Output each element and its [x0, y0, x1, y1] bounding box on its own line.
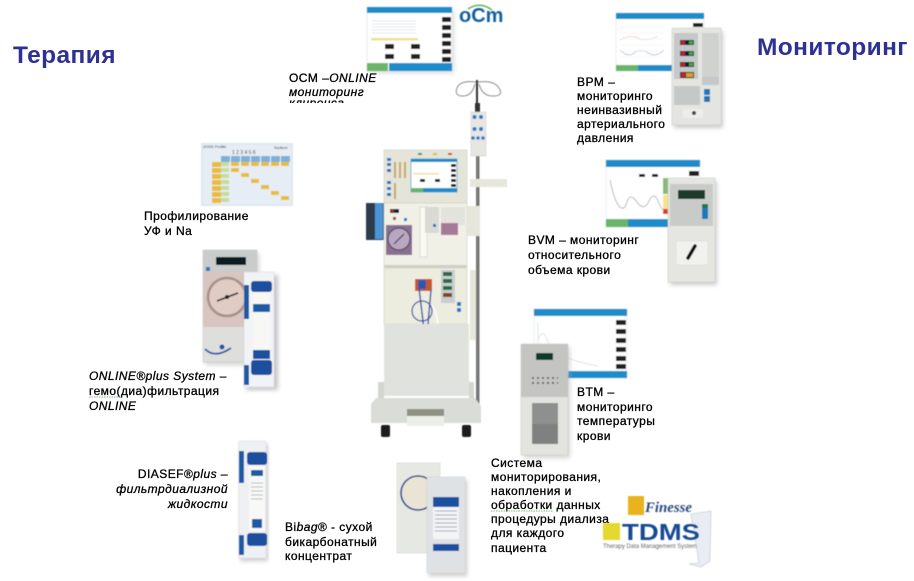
- divider shelf: [384, 265, 467, 268]
- BPM caption: артериального: [577, 117, 665, 131]
- Finesse TDMS logo: [603, 496, 711, 567]
- Bibag caption: Bibag® - сухой: [285, 520, 373, 534]
- Profile card: dOSS Profile: [203, 144, 227, 149]
- Bibag caption: бикарбонатный: [285, 535, 377, 549]
- Finesse TDMS logo: Finesse: [644, 500, 692, 516]
- concentrate pouch: [366, 203, 386, 240]
- BPM caption: неинвазивный: [577, 103, 662, 117]
- BVM caption: относительного: [528, 248, 621, 262]
- ONLINEplus caption: ONLINE®plus System –: [89, 369, 227, 383]
- TDMS caption: [491, 456, 609, 555]
- TDMS caption: мониторирования,: [491, 470, 601, 484]
- BTM caption: мониторинго: [577, 400, 653, 414]
- Profile card: [201, 143, 293, 206]
- TDMS caption: процедуры диализа: [491, 512, 609, 526]
- BTM caption: [577, 385, 655, 443]
- Bibag caption: [285, 520, 377, 563]
- middle section with pump: [384, 203, 480, 267]
- ONLINEplus caption: ONLINE: [89, 399, 137, 413]
- dialysis machine: [366, 80, 507, 437]
- BTM caption: BTM –: [577, 385, 615, 399]
- Profile card: Sodium: [274, 145, 288, 150]
- wheels: [381, 425, 471, 437]
- ONLINEplus caption: [89, 369, 227, 413]
- Bibag caption: концентрат: [285, 549, 352, 563]
- BVM caption: объема крови: [528, 263, 611, 277]
- ONLINEplus module: [203, 250, 278, 390]
- BVM caption: BVM – мониторинг: [528, 233, 639, 247]
- BPM caption: BPM –: [577, 75, 615, 89]
- OCM caption: клиренса: [289, 96, 344, 110]
- lower body: [384, 324, 469, 396]
- remote control: [471, 112, 486, 156]
- DIASEFplus caption: [116, 467, 228, 511]
- Profile caption: [144, 209, 249, 238]
- BPM screen and control panel: [616, 13, 723, 128]
- DIASEFplus caption: жидкости: [167, 497, 228, 511]
- Profile card: 1 2 3 4 5 6: [232, 150, 256, 156]
- TDMS caption: накопления и: [491, 484, 572, 498]
- OCM caption: мониторинг: [289, 85, 364, 99]
- DIASEFplus caption: DIASEF®plus –: [138, 467, 228, 481]
- Finesse TDMS logo: TDMS: [622, 519, 700, 545]
- heading: monitoring: Мониторинг: [757, 34, 908, 61]
- upper housing and screen: [384, 150, 467, 203]
- BTM screen and control panel: [521, 309, 627, 458]
- Finesse TDMS logo: Therapy Data Management System: [603, 544, 697, 550]
- Profile caption: УФ и Na: [144, 224, 192, 238]
- DIASEFplus filter: [239, 441, 268, 561]
- OCM logo: oCm: [459, 5, 503, 27]
- BTM caption: крови: [577, 429, 611, 443]
- OCM caption: [289, 73, 376, 103]
- TDMS caption: пациента: [491, 541, 547, 555]
- Bibag holder and bag: [397, 463, 467, 576]
- TDMS caption: Система: [491, 456, 542, 470]
- BVM caption: [528, 233, 639, 277]
- lower panel with blood lines: [384, 268, 476, 348]
- BTM caption: температуры: [577, 414, 655, 428]
- OCM caption: OCM –ONLINE: [289, 71, 377, 85]
- TDMS caption: для каждого: [491, 526, 564, 540]
- BPM caption: [577, 75, 665, 145]
- pole clamp: [470, 179, 507, 187]
- Profile caption: Профилирование: [144, 209, 249, 223]
- heading: therapy: Терапия: [13, 42, 116, 69]
- TDMS caption: обработки данных: [491, 498, 601, 512]
- BVM screen and control panel: [606, 160, 717, 285]
- DIASEFplus caption: фильтрдиализной: [116, 482, 228, 496]
- BPM caption: мониторинго: [577, 89, 653, 103]
- OCM screen image: [367, 7, 454, 73]
- base with drawer: [371, 398, 481, 426]
- IV pole with hook: [456, 80, 501, 404]
- BPM caption: давления: [577, 131, 634, 145]
- ONLINEplus caption: гемо(диа)фильтрация: [89, 384, 219, 398]
